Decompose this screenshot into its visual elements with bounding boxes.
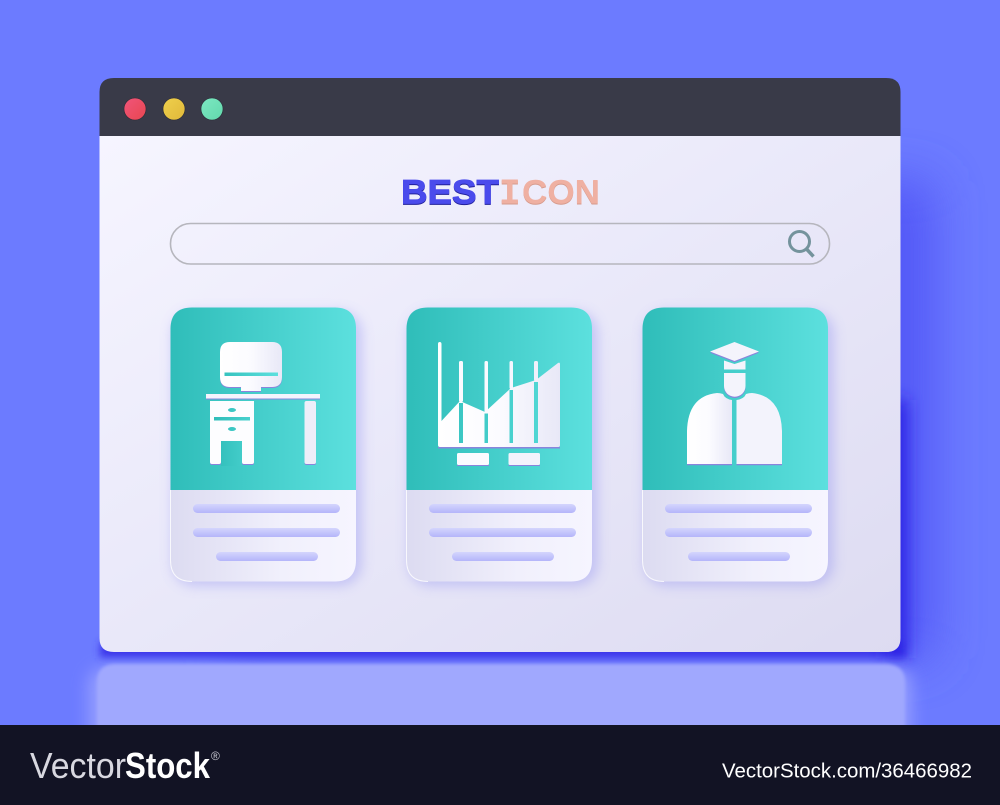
button: yellow [163, 98, 185, 120]
brand logo: ® [211, 749, 220, 763]
icon: graduate [687, 342, 782, 465]
logo heading: I [499, 174, 521, 216]
footer bar [0, 725, 1000, 805]
text lines [665, 504, 812, 561]
card: chart [406, 308, 598, 586]
brand logo: Stock [125, 745, 211, 786]
browser window [100, 78, 900, 652]
logo heading: BEST [401, 174, 499, 212]
title bar [100, 78, 900, 136]
logo heading: BEST [401, 173, 499, 211]
logo heading: I [499, 173, 521, 214]
logo heading: CON [522, 174, 600, 212]
window shadow [100, 180, 935, 660]
icon: area chart [438, 342, 560, 466]
brand logo: Vector [30, 745, 126, 786]
card: desk [170, 308, 362, 586]
logo heading [401, 173, 600, 216]
brand logo [30, 745, 220, 786]
card: graduate [642, 308, 834, 586]
icon: desk with monitor [206, 342, 320, 466]
icon: magnifier [790, 232, 814, 256]
window body [100, 136, 900, 652]
logo heading: CON [522, 173, 600, 211]
search bar [170, 224, 830, 264]
text lines [193, 504, 340, 561]
image id: VectorStock.com/36466982 [722, 760, 972, 782]
floor reflection [88, 664, 912, 758]
text lines [429, 504, 576, 561]
button: red [124, 98, 146, 120]
button: green [201, 98, 223, 120]
